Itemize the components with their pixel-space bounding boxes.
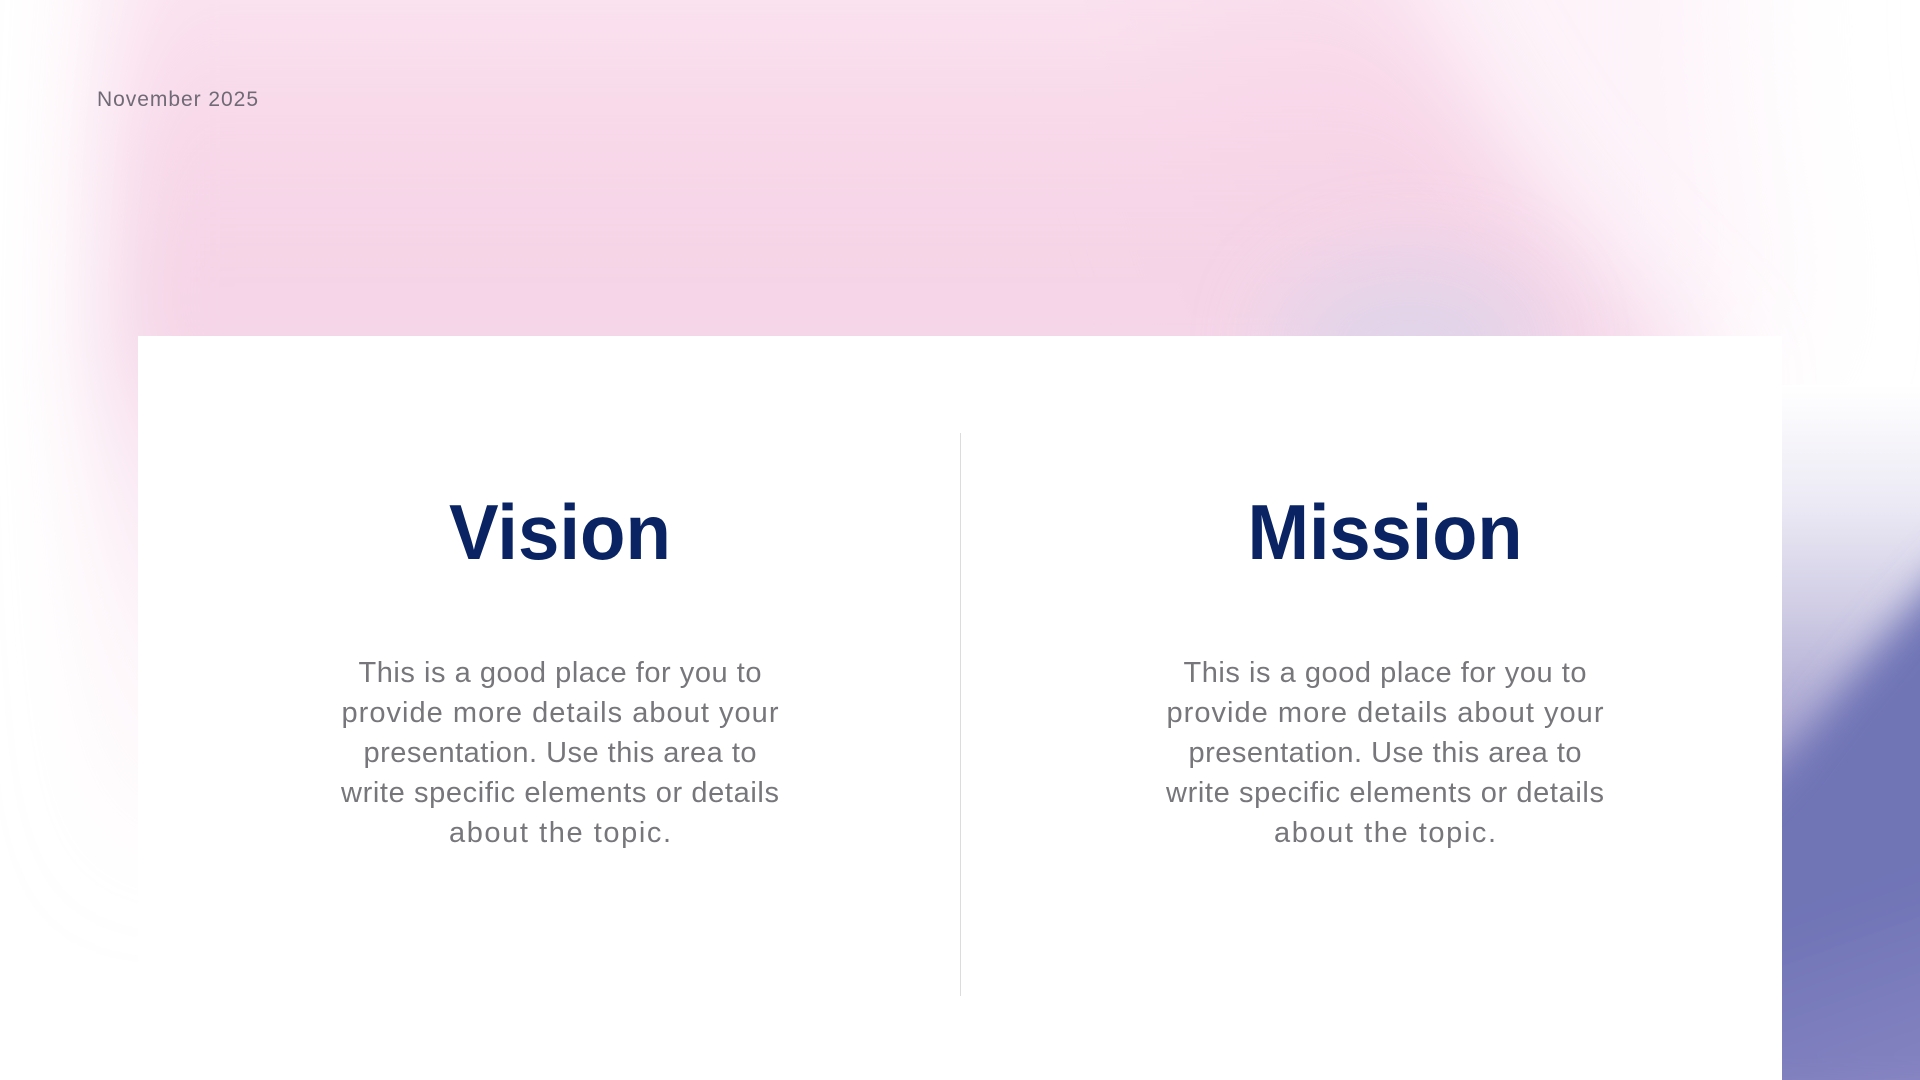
heading: vision: Vision bbox=[449, 488, 671, 576]
text block: mission description: presentation. Use this area to bbox=[1188, 737, 1582, 769]
heading: mission: Mission bbox=[1248, 488, 1522, 576]
text block: mission description: write specific elements or details bbox=[1165, 777, 1604, 809]
text block: mission description: provide more details about your bbox=[1166, 697, 1604, 729]
text block: vision description: write specific elements or details bbox=[340, 777, 779, 809]
panel: mission bbox=[1165, 488, 1604, 849]
text block: vision description: presentation. Use this area to bbox=[364, 737, 756, 769]
date label: November 2025 bbox=[97, 88, 258, 111]
text block: mission description bbox=[1165, 657, 1604, 849]
text block: vision description: provide more details about your bbox=[342, 697, 779, 729]
text block: vision description: This is a good place for you to bbox=[358, 657, 762, 689]
text block: vision description: about the topic. bbox=[449, 817, 671, 849]
text block: mission description: This is a good place for you to bbox=[1184, 657, 1586, 689]
panel: vision bbox=[340, 488, 779, 849]
text block: mission description: about the topic. bbox=[1274, 817, 1496, 849]
text block: vision description bbox=[340, 657, 779, 849]
divider bbox=[960, 433, 961, 996]
panel: white card bbox=[138, 336, 1782, 1080]
